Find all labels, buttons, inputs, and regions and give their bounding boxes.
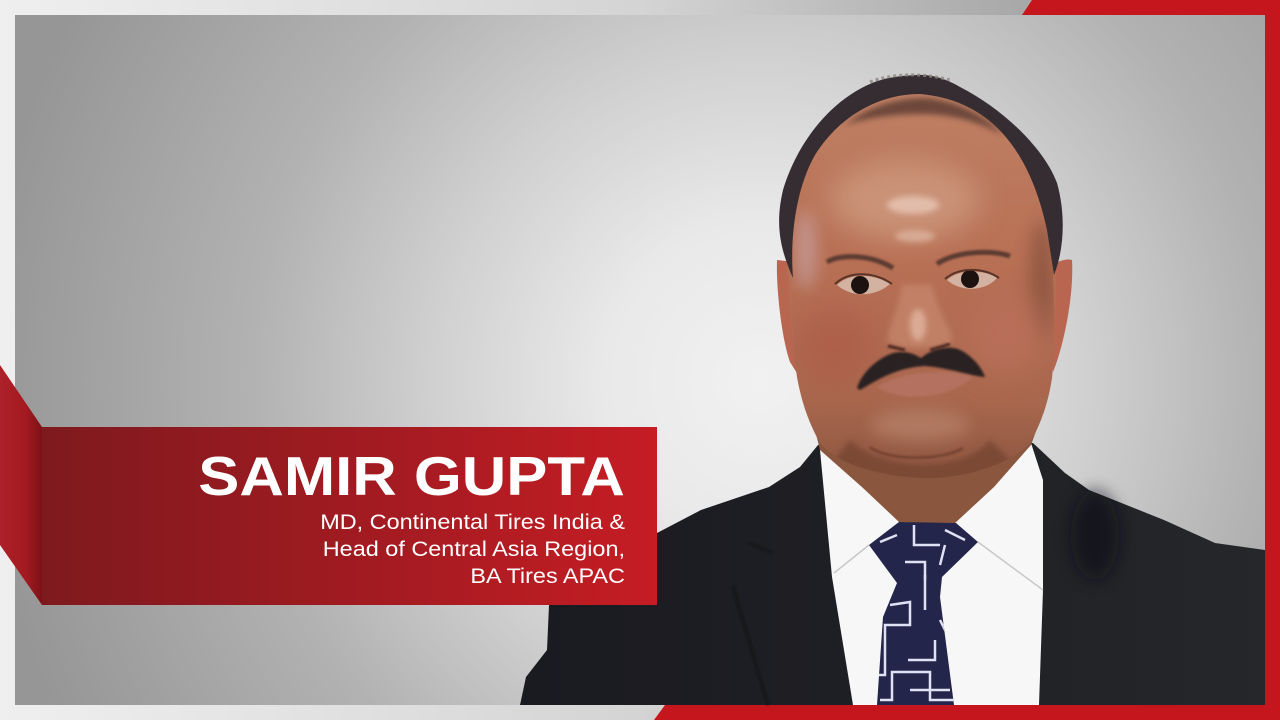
ears [777, 259, 1072, 378]
lips [877, 372, 973, 397]
name banner [0, 365, 657, 605]
name heading: SAMIR GUPTA [198, 445, 625, 507]
tie [869, 522, 978, 705]
banner fold [0, 365, 657, 605]
shirt [820, 443, 1043, 705]
eyes [835, 270, 999, 294]
hair [779, 75, 1063, 278]
eyebrows [827, 252, 1010, 268]
head [777, 75, 1072, 490]
role text: BA Tires APAC [470, 564, 625, 588]
neck [815, 420, 1040, 524]
suit jacket [520, 443, 1265, 705]
role text: Head of Central Asia Region, [323, 537, 625, 561]
portrait: man in dark suit [520, 73, 1265, 706]
nose [888, 285, 952, 350]
face skin [786, 86, 1056, 478]
role text: MD, Continental Tires India & [320, 510, 625, 534]
chin line [870, 447, 963, 458]
collar line details [834, 542, 1043, 590]
face shading [796, 160, 1054, 490]
role text [320, 510, 625, 588]
moustache [857, 348, 985, 390]
